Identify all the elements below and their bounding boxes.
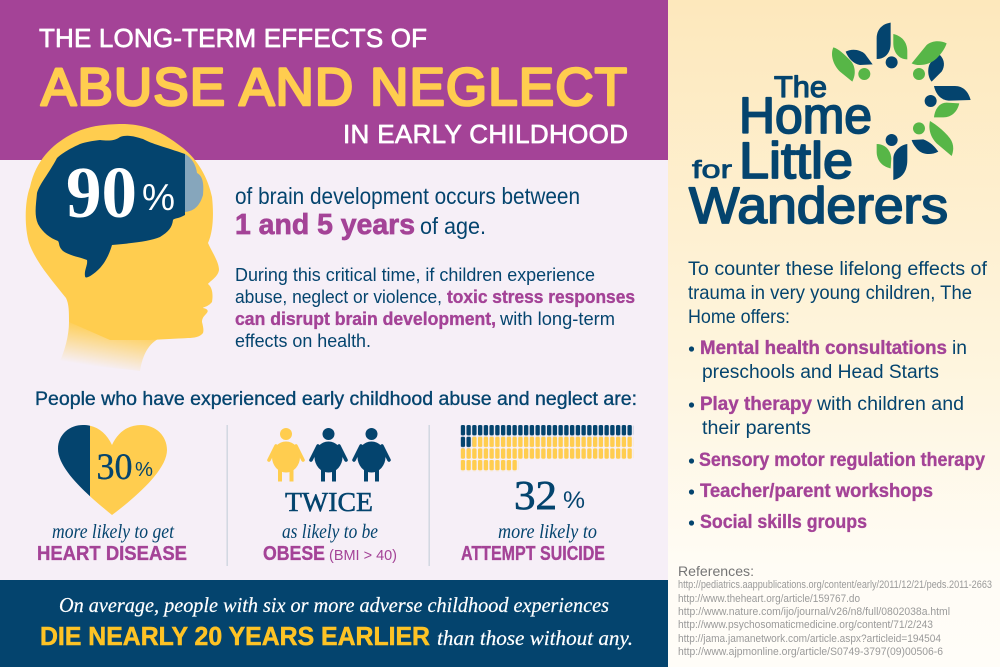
32 percent: 32: [514, 472, 557, 518]
icon: child head with brain: %: [142, 177, 175, 218]
title line 1: THE LONG-TERM EFFECTS OF: [39, 23, 427, 53]
30 percent: 30: [96, 447, 132, 488]
item: play therapy: their parents: [702, 418, 811, 439]
icon: three figures: [269, 428, 389, 482]
stat: heart disease: [37, 425, 187, 565]
twice: TWICE: [285, 487, 373, 517]
services list: [689, 338, 985, 533]
logo wordmark: [689, 71, 948, 234]
stat: heart disease: HEART DISEASE: [37, 542, 187, 565]
logo emblem: [832, 23, 971, 180]
caption: more likely to: [498, 522, 597, 543]
toxic stress paragraph: with long-term: [499, 309, 615, 329]
subheading: People who have experienced early childhood abuse and neglect are:: [35, 388, 637, 410]
logo wordmark: for: [692, 156, 732, 184]
footer line 1: On average, people with six or more adverse childhood experiences: [59, 593, 609, 617]
references: http://www.theheart.org/article/159767.do: [678, 593, 860, 605]
toxic stress paragraph: During this critical time, if children experience: [235, 265, 595, 285]
stat: obesity: (BMI > 40): [329, 547, 397, 564]
item: mental health: Mental health consultations: [700, 338, 947, 359]
brain development statement: of age.: [420, 213, 486, 239]
logo wordmark: Home: [739, 87, 872, 144]
caption: as likely to be: [282, 522, 378, 543]
toxic stress paragraph: abuse, neglect or violence,: [235, 287, 442, 307]
side intro text: trauma in very young children, The: [688, 282, 972, 304]
references: References:: [678, 563, 754, 579]
stat: suicide: %: [563, 487, 585, 514]
icon: child head with brain: [26, 124, 219, 371]
item: play therapy: Play therapy: [700, 394, 812, 415]
item: mental health: in: [952, 338, 967, 359]
brain, developed portion: [36, 136, 185, 277]
toxic stress paragraph: toxic stress responses: [447, 287, 635, 307]
stat: suicide: ATTEMPT SUICIDE: [461, 542, 605, 565]
side panel background: [668, 0, 1000, 667]
item: sensory motor: Sensory motor regulation therapy: [699, 450, 985, 471]
brain development statement: of brain development occurs between: [235, 183, 580, 209]
item: mental health: preschools and Head Starts: [702, 362, 939, 383]
stat: heart disease: %: [135, 459, 153, 481]
footer band: [0, 580, 668, 667]
main panel background: [0, 0, 668, 667]
references: http://jama.jamanetwork.com/article.aspx?articleid=194504: [678, 633, 941, 645]
references: http://www.ajpmonline.org/article/S0749-3797(09)00506-6: [678, 646, 943, 658]
item: workshops: Teacher/parent workshops: [700, 481, 933, 502]
side intro text: Home offers:: [688, 306, 790, 328]
column dividers: [226, 425, 228, 566]
references: http://www.psychosomaticmedicine.org/content/71/2/243: [678, 619, 933, 631]
logo wordmark: The: [774, 71, 827, 104]
stat: obesity: [263, 428, 397, 565]
stat: suicide: [461, 425, 633, 565]
item: social skills: Social skills groups: [700, 512, 867, 533]
footer highlight: DIE NEARLY 20 YEARS EARLIER: [40, 623, 430, 651]
logo wordmark: Wanderers: [689, 177, 948, 234]
logo wordmark: Little: [739, 132, 853, 189]
side intro text: [688, 258, 988, 328]
logo: [689, 23, 971, 234]
toxic stress paragraph: [235, 265, 635, 351]
item: play therapy: [689, 394, 964, 439]
stat: obesity: OBESE: [263, 542, 325, 565]
head silhouette: [26, 124, 219, 340]
toxic stress paragraph: effects on health.: [235, 331, 371, 351]
caption: more likely to get: [52, 522, 175, 543]
brain, undeveloped portion: [185, 154, 203, 212]
item: play therapy: with children and: [816, 394, 964, 415]
brain development statement: [235, 183, 580, 241]
icon: hundred-unit pictogram: [461, 425, 633, 472]
90 percent: 90: [66, 152, 137, 233]
icon: heart half filled: [58, 425, 167, 515]
toxic stress paragraph: can disrupt brain development,: [235, 309, 496, 329]
side intro text: To counter these lifelong effects of: [688, 258, 988, 280]
title line 3: IN EARLY CHILDHOOD: [343, 119, 628, 149]
item: mental health: [689, 338, 967, 383]
header band: [0, 0, 668, 160]
neck fade: [60, 322, 188, 371]
title main: ABUSE AND NEGLECT: [41, 58, 627, 117]
references: [678, 563, 992, 658]
brain development statement: 1 and 5 years: [235, 209, 415, 241]
references: http://www.nature.com/ijo/journal/v26/n8/full/0802038a.html: [678, 606, 950, 618]
footer line 2: than those without any.: [437, 626, 633, 650]
